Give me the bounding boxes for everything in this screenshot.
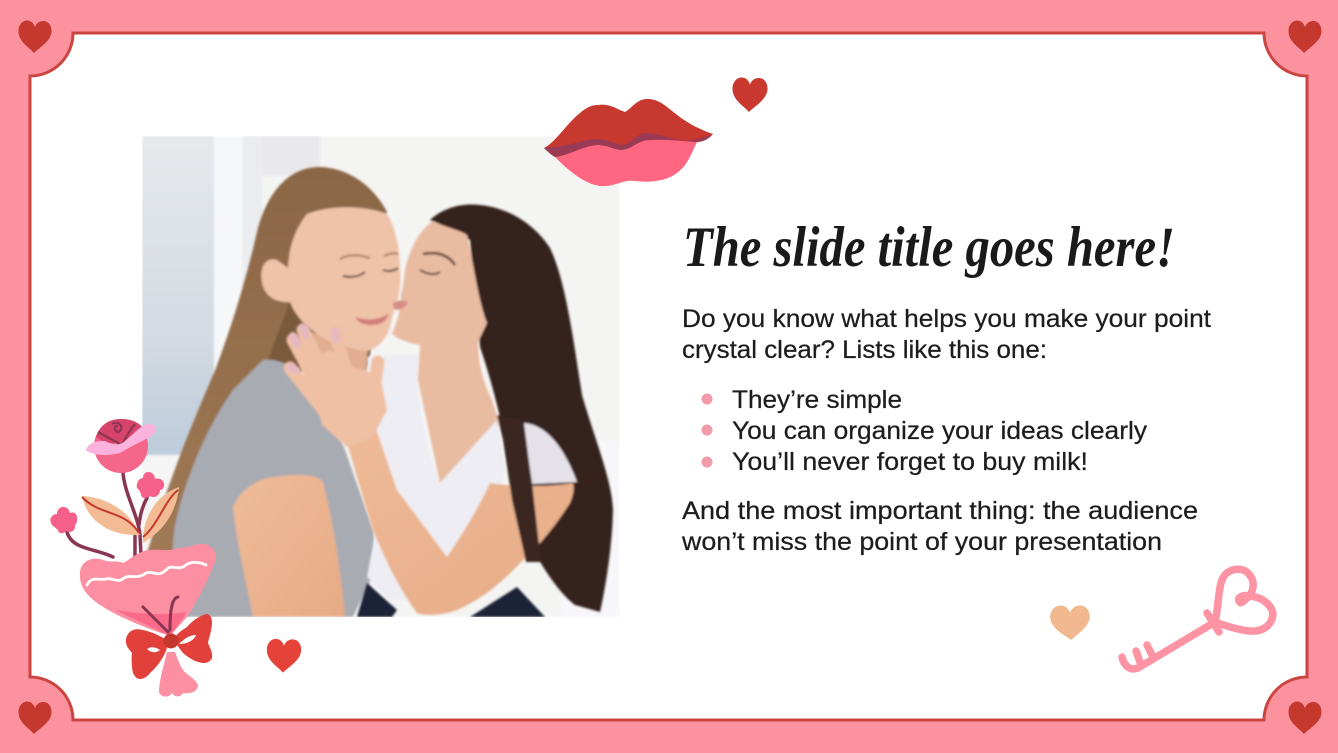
wrapper band [115, 610, 187, 636]
icon: heart key [1122, 569, 1273, 669]
text block: closing: And the most important thing: the audience [682, 497, 1198, 525]
rose top shade [96, 419, 146, 443]
small flower left [50, 507, 77, 533]
key guard [1207, 613, 1219, 632]
text block: intro: Do you know what helps you make your point [682, 305, 1211, 333]
title: The slide title goes here! [683, 216, 1175, 279]
bullet list: They’re simple [732, 386, 902, 414]
bow knot [164, 634, 178, 648]
icon: corner heart bottom left [18, 702, 52, 734]
leaf right [143, 487, 179, 543]
blonde woman [147, 167, 401, 617]
photo background wall [142, 136, 620, 617]
icon: corner heart top left [18, 20, 52, 53]
bouquet wrapper [80, 544, 216, 636]
bow right loop [174, 614, 212, 663]
brunette woman [290, 204, 613, 617]
bullet list [702, 386, 1148, 476]
bow ribbons [143, 597, 178, 632]
bouquet illustration [50, 419, 216, 697]
bullet list: You can organize your ideas clearly [732, 417, 1148, 445]
rose spiral [98, 423, 135, 445]
lips illustration [544, 99, 713, 186]
stems [67, 473, 147, 557]
bullet list: You’ll never forget to buy milk! [732, 448, 1088, 476]
photo: two women, one kissing the other's cheek [142, 136, 620, 617]
icon: corner heart bottom right [1288, 702, 1322, 734]
lip shadow band [544, 133, 713, 157]
text block: closing [681, 497, 1198, 556]
icon: heart below photo [267, 639, 301, 673]
upper lip [544, 99, 713, 157]
rose head [94, 419, 148, 473]
leaf veins [82, 490, 178, 537]
leaf left [82, 496, 140, 535]
icon: tan heart [1050, 606, 1090, 640]
icon: corner heart top right [1288, 20, 1322, 53]
rose petal [86, 424, 156, 455]
bow left loop [126, 629, 168, 679]
icon: heart beside lips [733, 78, 767, 112]
text block: closing: won’t miss the point of your presentation [681, 528, 1162, 556]
text block: intro [682, 305, 1211, 364]
lower lip [555, 140, 697, 186]
bow tail [159, 652, 198, 697]
key heart bow [1215, 569, 1273, 631]
text block: intro: crystal clear? Lists like this one: [682, 336, 1047, 364]
small flower right [137, 472, 164, 498]
wrapper ruffle [87, 562, 206, 585]
key shaft and teeth [1122, 622, 1215, 669]
bow highlights [147, 635, 196, 652]
